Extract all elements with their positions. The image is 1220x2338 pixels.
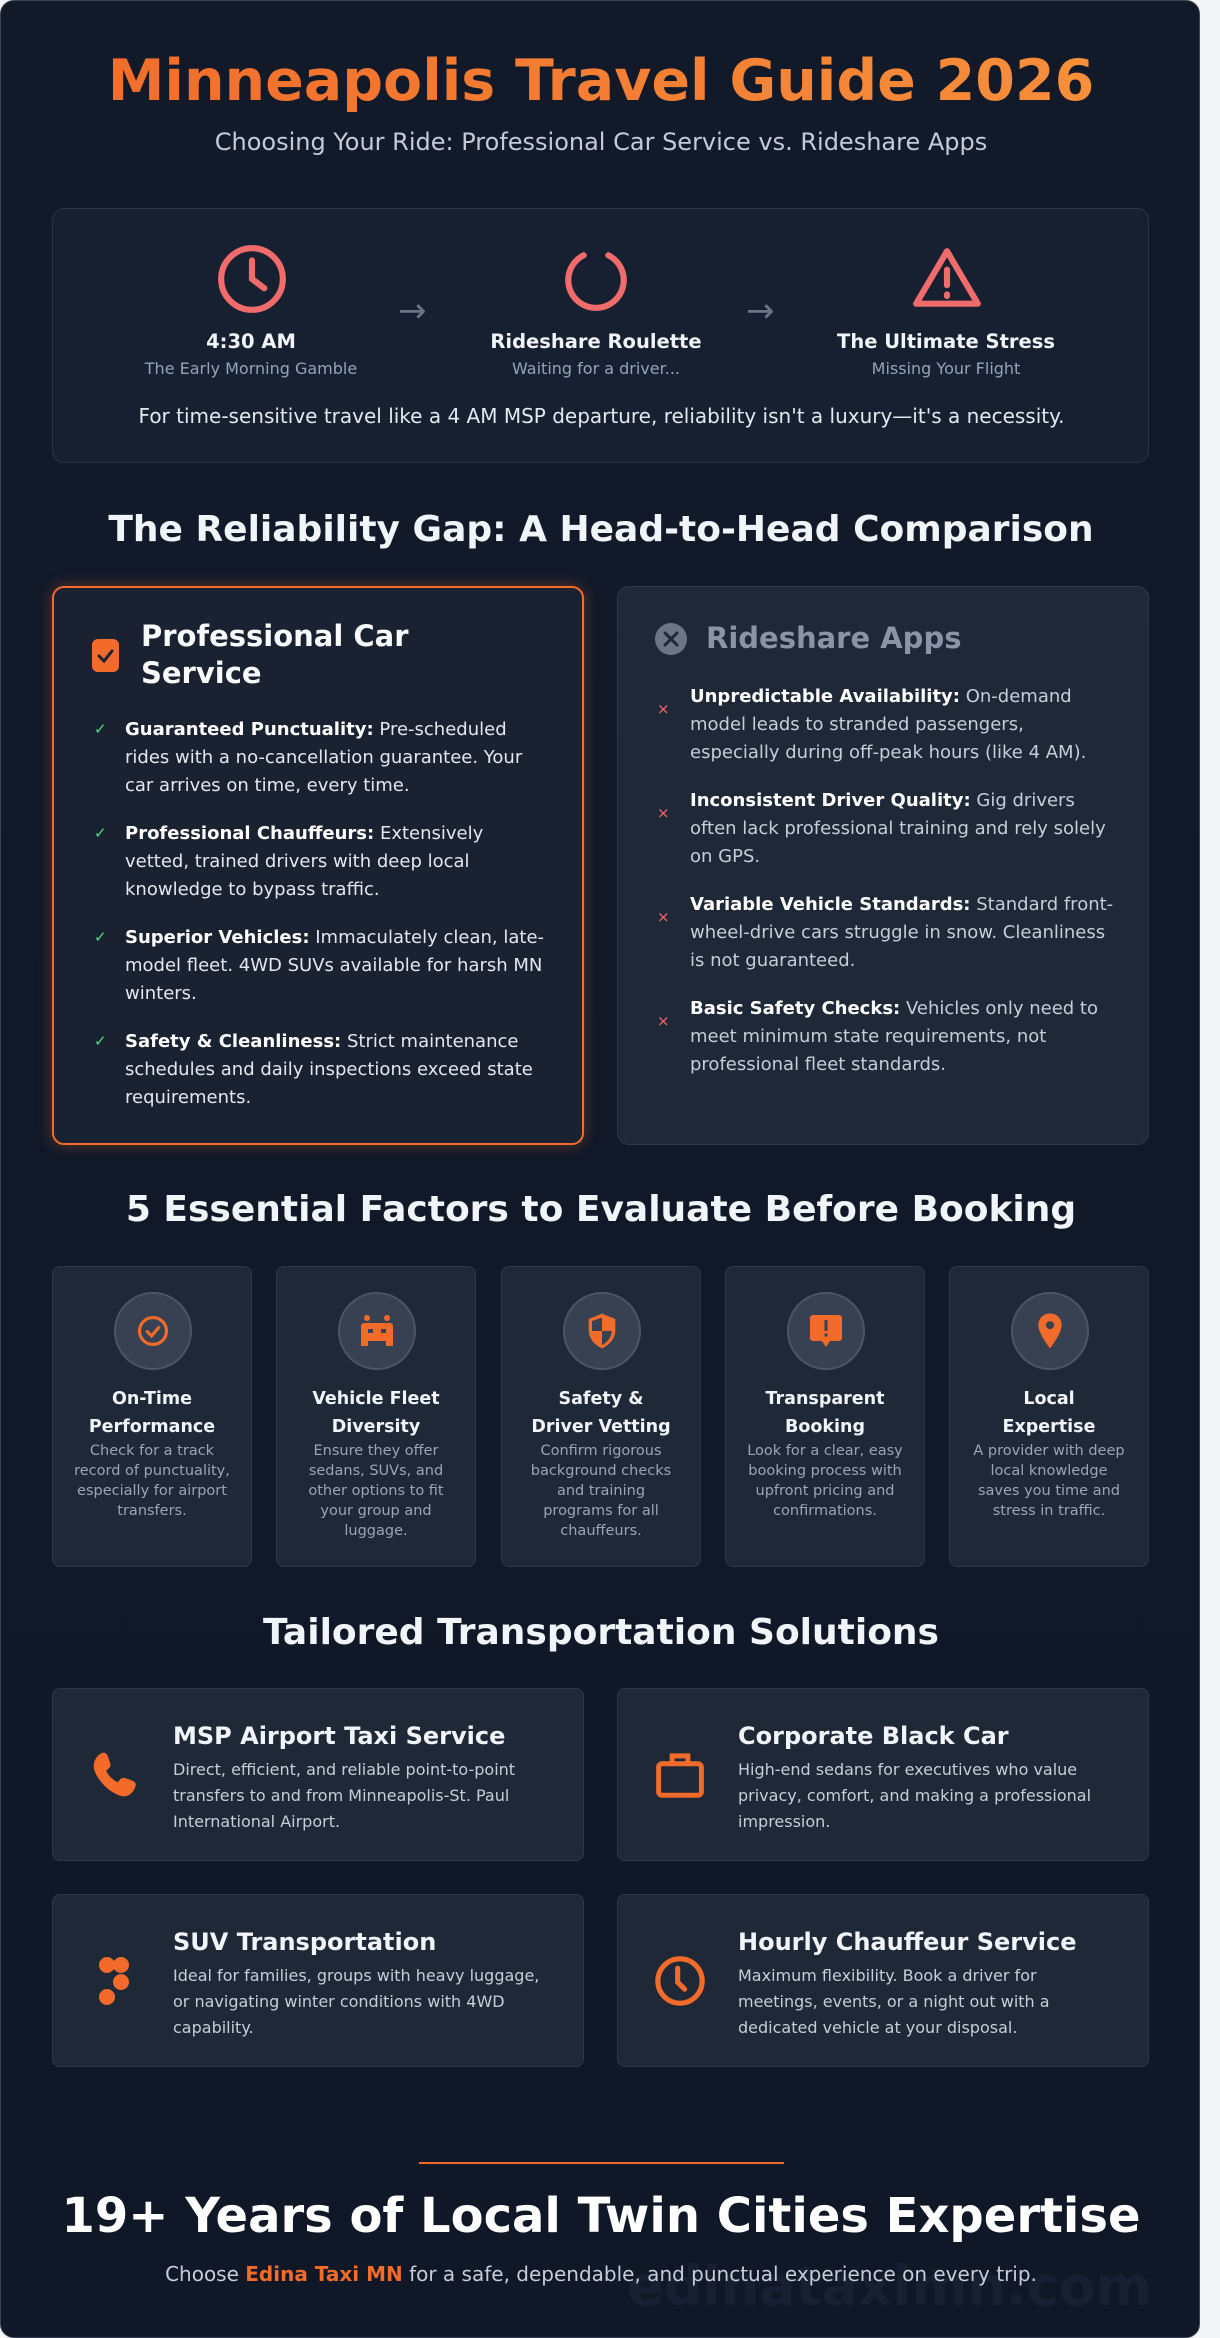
list items: Guaranteed Punctuality: Pre-scheduled rides with a no-cancellation guarantee. Your car arrives on time, every time. — [125, 719, 522, 796]
service card: corporate: Corporate Black Car — [738, 1722, 1009, 1750]
icon: check circle — [114, 1292, 192, 1370]
heading — [141, 619, 409, 690]
list items: ✓ — [94, 720, 107, 738]
list items: Superior Vehicles: Immaculately clean, late-model fleet. 4WD SUVs available for harsh MN winters. — [125, 927, 544, 1004]
list items: Basic Safety Checks: Vehicles only need to meet minimum state requirements, not professional fleet standards. — [690, 998, 1098, 1075]
heading: Professional Car — [141, 619, 409, 653]
step 2 text — [490, 330, 702, 378]
icon: phone — [94, 1752, 136, 1796]
icon: x circle — [655, 623, 687, 655]
step 1 text: The Early Morning Gamble — [145, 359, 357, 378]
list items: ✓ — [94, 928, 107, 946]
icon: alert message — [787, 1292, 865, 1370]
factor card: safety: Confirm rigorous background checks and training programs for all chauffeurs. — [531, 1443, 671, 1539]
heading: Service — [141, 656, 262, 690]
list items: ✓ — [94, 824, 107, 842]
service card: corporate: High-end sedans for executives who value privacy, comfort, and making a professional impression. — [738, 1760, 1091, 1831]
arrow 1: → — [398, 291, 426, 331]
step 1 text: 4:30 AM — [206, 330, 296, 353]
icon: vehicle — [338, 1292, 416, 1370]
step 1 text — [144, 330, 357, 378]
icon: clock — [218, 245, 286, 313]
heading: 5 factors: 5 Essential Factors to Evaluate Before Booking — [126, 1189, 1076, 1230]
list items — [657, 686, 1113, 1075]
list items: Variable Vehicle Standards: Standard front-wheel-drive cars struggle in snow. Cleanliness — [690, 894, 1113, 943]
heading: reliability gap: The Reliability Gap: A Head-to-Head Comparison — [108, 509, 1094, 550]
icon: group dots — [99, 1957, 129, 2005]
service card: hourly — [617, 1894, 1149, 2067]
icon: spinner — [565, 252, 627, 311]
divider — [419, 2162, 784, 2164]
service card: SUV: Ideal for families, groups with heavy luggage, or navigating winter conditions with 4WD capability. — [173, 1966, 539, 2037]
list items: is not guaranteed. — [690, 950, 855, 971]
icon: map pin — [1011, 1292, 1089, 1370]
service card: airport taxi: Direct, efficient, and reliable point-to-point transfers to and from Minneapolis-St. Paul International Airport. — [173, 1760, 515, 1831]
factor card: fleet — [276, 1266, 476, 1567]
heading: Rideshare Apps — [706, 621, 961, 655]
arrow 2: → — [746, 291, 774, 331]
list items: ✓ — [94, 1032, 107, 1050]
list items: × — [657, 804, 670, 822]
factor card: fleet: Ensure they offer sedans, SUVs, and other options to fit your group and luggage. — [308, 1443, 444, 1539]
list items: Professional Chauffeurs: Extensively vetted, trained drivers with deep local knowledge to bypass traffic. — [125, 823, 483, 900]
list items: × — [657, 908, 670, 926]
factor card: local: Expertise — [1003, 1417, 1095, 1437]
panel: early morning scenario — [52, 208, 1149, 463]
icon: orange check — [92, 639, 119, 672]
step 3 text: Missing Your Flight — [872, 359, 1020, 378]
step 2 text: Waiting for a driver... — [512, 359, 680, 378]
factor card: local — [949, 1266, 1149, 1567]
factor card: fleet: Diversity — [332, 1417, 420, 1437]
service card: hourly: Maximum flexibility. Book a driver for meetings, events, or a night out with a dedicated vehicle at your disposal. — [738, 1966, 1050, 2037]
list items: Safety & Cleanliness: Strict maintenance schedules and daily inspections exceed state requirements. — [125, 1031, 533, 1108]
factor card: on-time: Check for a track record of punctuality, especially for airport transfers. — [74, 1443, 230, 1519]
icon: clock — [655, 1956, 705, 2006]
subtitle: Choosing Your Ride: Professional Car Service vs. Rideshare Apps — [215, 128, 987, 156]
panel: rideshare apps — [617, 586, 1149, 1145]
key message: For time-sensitive travel like a 4 AM MSP departure, reliability isn't a luxury—it's a necessity. — [139, 404, 1064, 428]
service card: corporate — [617, 1688, 1149, 1861]
title: Minneapolis Travel Guide 2026 — [108, 48, 1094, 114]
watermark: edinataximn.com — [627, 2255, 1152, 2318]
list items: Inconsistent Driver Quality: Gig drivers often lack professional training and rely solely on GPS. — [690, 790, 1106, 867]
closing text: Choose Edina Taxi MN for a safe, dependable, and punctual experience on every trip. — [165, 2262, 1037, 2286]
step 2 text: Rideshare Roulette — [490, 330, 702, 353]
service card: airport taxi: MSP Airport Taxi Service — [173, 1722, 505, 1750]
factor card: booking — [725, 1266, 925, 1567]
factor card: booking: Look for a clear, easy booking process with upfront pricing and confirmations. — [747, 1443, 903, 1519]
factor card: on-time — [52, 1266, 252, 1567]
factor card: booking: Transparent — [766, 1389, 884, 1409]
service card: SUV — [52, 1894, 584, 2067]
closing heading: 19+ Years of Local Twin Cities Expertise — [61, 2188, 1141, 2244]
service card: hourly: Hourly Chauffeur Service — [738, 1928, 1076, 1956]
service card: airport taxi — [52, 1688, 584, 1861]
list items — [94, 719, 544, 1108]
step 3 text: The Ultimate Stress — [837, 330, 1055, 353]
factor card: local: A provider with deep local knowledge saves you time and stress in traffic. — [973, 1443, 1125, 1519]
factor card: safety: Safety & — [558, 1389, 644, 1409]
step 3 text — [837, 330, 1055, 378]
icon: shield — [563, 1292, 641, 1370]
list items: × — [657, 700, 670, 718]
list items: × — [657, 1012, 670, 1030]
icon: briefcase — [656, 1753, 704, 1798]
list items: Unpredictable Availability: On-demand model leads to stranded passengers, especially during off-peak hours (like 4 AM). — [690, 686, 1086, 763]
panel: professional car service — [52, 586, 584, 1145]
factor card: safety — [501, 1266, 701, 1567]
icon: warning — [913, 248, 981, 307]
factor card: on-time: Performance — [89, 1417, 215, 1437]
factor card: local: Local — [1023, 1389, 1075, 1409]
service card: SUV: SUV Transportation — [173, 1928, 436, 1956]
factor card: on-time: On-Time — [112, 1389, 192, 1409]
factor card: booking: Booking — [785, 1417, 865, 1437]
heading: tailored solutions: Tailored Transportation Solutions — [263, 1612, 939, 1653]
factor card: fleet: Vehicle Fleet — [312, 1389, 440, 1409]
factor card: safety: Driver Vetting — [531, 1417, 671, 1437]
